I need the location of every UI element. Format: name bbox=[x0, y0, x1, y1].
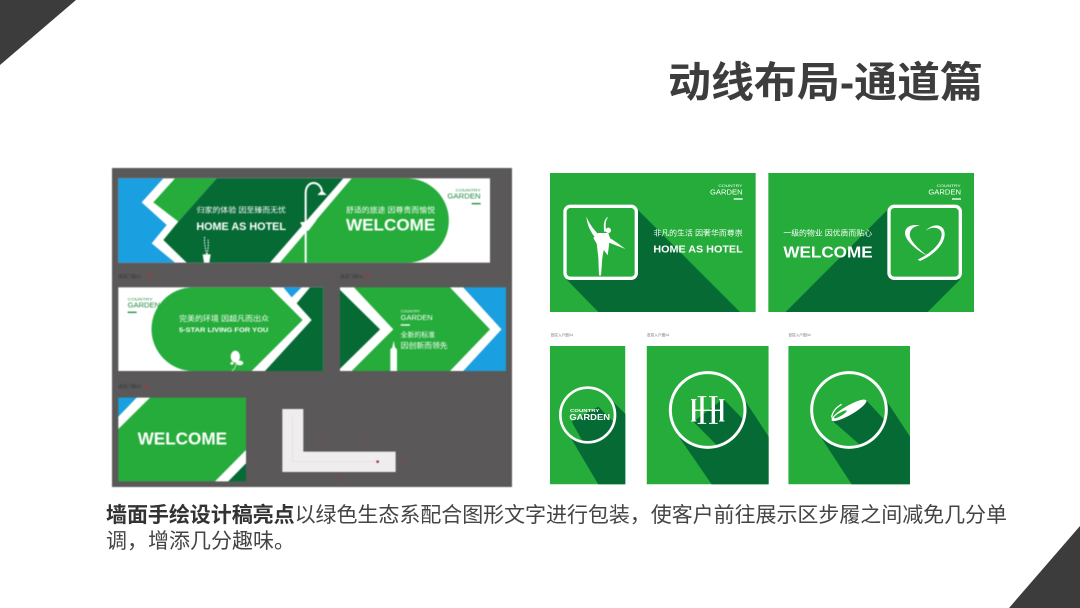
leaf icon bbox=[230, 351, 243, 371]
country garden logo: GARDEN bbox=[447, 191, 481, 200]
small captions row 1 bbox=[118, 273, 370, 280]
logo: GARDEN bbox=[710, 188, 743, 197]
sign text: HOME AS HOTEL bbox=[653, 245, 743, 256]
logo bbox=[710, 184, 743, 200]
banner 1 left text: HOME AS HOTEL bbox=[196, 221, 286, 233]
banner 3 logo bbox=[401, 309, 433, 326]
corner triangle: bottom right bbox=[1009, 526, 1080, 608]
icon: swoosh leaf bbox=[831, 400, 866, 422]
logo text: GARDEN bbox=[569, 412, 610, 422]
logo text: COUNTRY bbox=[570, 408, 600, 414]
logo: COUNTRY bbox=[128, 297, 153, 302]
body text: 调，增添几分趣味。 bbox=[106, 530, 295, 553]
sign text bbox=[783, 229, 873, 261]
panel: green signs bottom row bbox=[550, 332, 910, 484]
banner 2 text: 5-STAR LIVING FOR YOU bbox=[179, 327, 269, 334]
logo text bbox=[570, 409, 610, 420]
icon: ballerina bbox=[586, 217, 625, 275]
sign text: 一级的物业 因优质而贴心 bbox=[783, 229, 873, 238]
logo: COUNTRY bbox=[937, 184, 961, 188]
small captions row 1: 通道门楣02 bbox=[340, 273, 364, 280]
sign text: 非凡的生活 因奢华而尊崇 bbox=[653, 229, 743, 238]
captions: 首层入户图04 bbox=[647, 332, 669, 337]
banner 2 text bbox=[179, 314, 270, 334]
banner 1 left text bbox=[196, 206, 286, 233]
country garden logo: COUNTRY bbox=[456, 188, 481, 193]
banner 4: welcome: WELCOME bbox=[138, 428, 227, 448]
banner 1 left text: 归家的体验 因至臻而无忧 bbox=[197, 206, 286, 215]
banner 3 text: 因创新而领先 bbox=[401, 340, 448, 350]
banner 3 logo: COUNTRY bbox=[401, 309, 420, 314]
body text bbox=[106, 503, 1007, 553]
banner 2: 5-star living bbox=[118, 287, 323, 371]
sign: heart bbox=[768, 173, 974, 312]
captions: 首层入户图04 bbox=[788, 332, 811, 337]
logo: GARDEN bbox=[928, 188, 961, 197]
panel: grey wall design board bbox=[112, 168, 512, 487]
title: 动线布局-通道篇 bbox=[668, 59, 983, 106]
tower icon bbox=[390, 341, 397, 371]
sign text bbox=[653, 229, 743, 256]
sign: leaf circle bbox=[788, 346, 910, 484]
sign: ballerina bbox=[550, 173, 756, 312]
country garden logo bbox=[447, 188, 481, 204]
corner triangle: top left bbox=[0, 0, 76, 65]
logo bbox=[128, 297, 160, 313]
sign: country garden circle bbox=[550, 346, 626, 484]
logo bbox=[928, 184, 961, 200]
lamp post icon bbox=[300, 183, 327, 263]
banner 3 logo: GARDEN bbox=[401, 313, 433, 322]
captions bbox=[551, 332, 811, 337]
logo: COUNTRY bbox=[718, 184, 743, 188]
body text: 墙面手绘设计稿亮点以绿色生态系配合图形文字进行包装，使客户前往展示区步履之间减免几分单 bbox=[106, 503, 1007, 527]
banner 2 text: 完美的环境 因超凡而出众 bbox=[179, 314, 270, 323]
captions: 首层入户图04 bbox=[551, 332, 573, 337]
logo: GARDEN bbox=[128, 300, 160, 309]
plant pot icon bbox=[203, 237, 211, 263]
small caption row 2 bbox=[118, 383, 150, 390]
banner 3 text: 全新的标准 bbox=[401, 330, 435, 339]
banner 1 right text: 舒适的旅途 因尊贵而愉悦 bbox=[346, 206, 436, 215]
panel: green signs top row bbox=[550, 173, 974, 312]
banner 3 text bbox=[401, 330, 448, 350]
L-shaped corridor plan bbox=[282, 409, 407, 481]
banner 1 right text bbox=[346, 206, 436, 235]
sign text: WELCOME bbox=[783, 244, 873, 261]
icon: heart bbox=[905, 225, 945, 261]
icon: HH monogram bbox=[691, 397, 724, 423]
banner 3: new standard bbox=[340, 287, 506, 371]
board background bbox=[112, 168, 512, 487]
sign: HH monogram circle bbox=[646, 346, 769, 484]
small captions row 1: 通道门楣01 bbox=[118, 273, 142, 280]
small caption row 2: 通道门楣03 bbox=[118, 383, 142, 390]
banner 4: welcome bbox=[118, 398, 246, 481]
banner 1: home as hotel / welcome bbox=[118, 178, 490, 263]
banner 1 right text: WELCOME bbox=[346, 216, 435, 235]
